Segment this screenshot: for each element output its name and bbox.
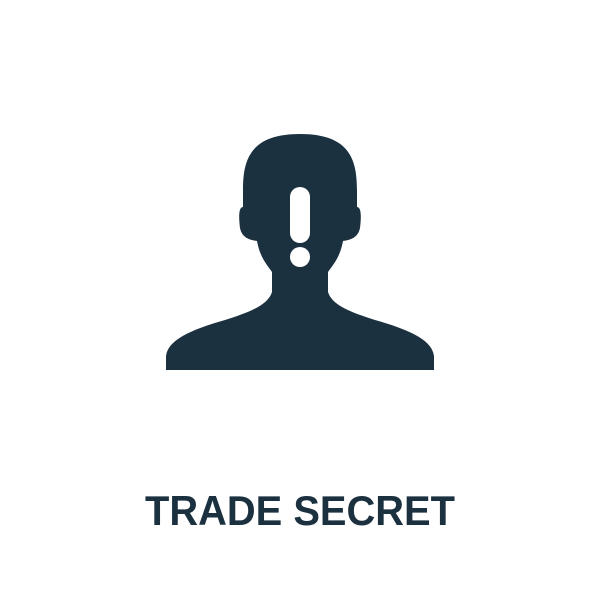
icon: person silhouette with exclamation (166, 134, 434, 370)
exclamation mark (290, 187, 310, 267)
title: TRADE SECRET (145, 487, 455, 534)
